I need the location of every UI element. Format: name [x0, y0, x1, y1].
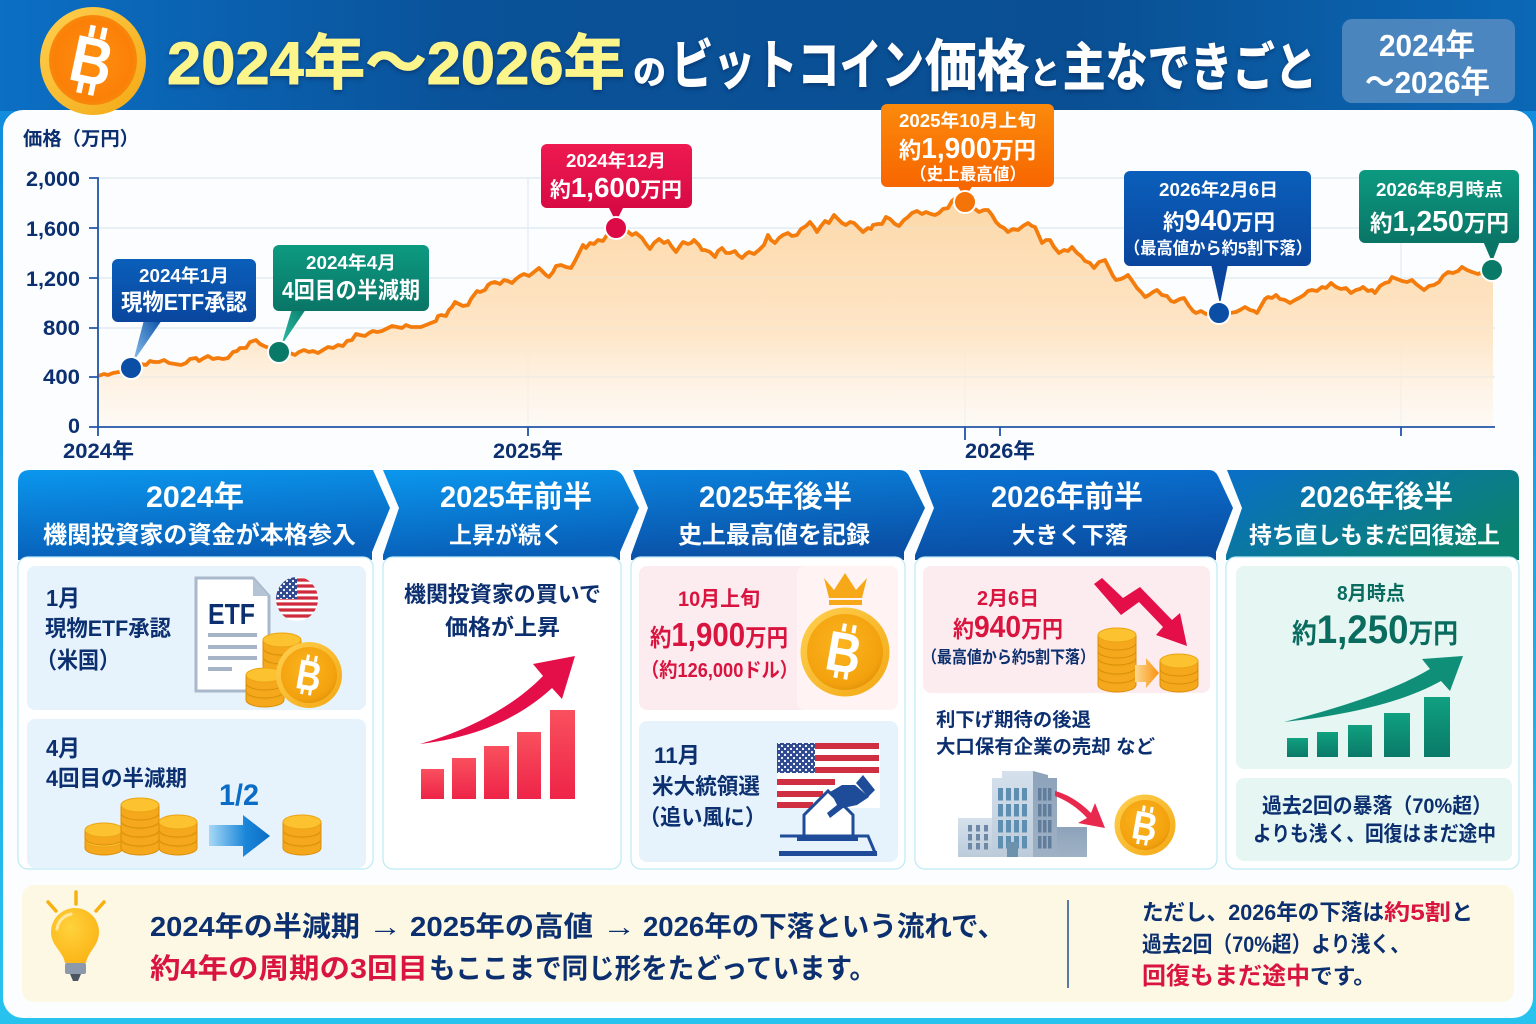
sub-panel: halving: 4月 — [46, 735, 80, 761]
icon: ballot box and hand — [779, 775, 877, 856]
icon: US flag circle — [276, 577, 318, 621]
panel: 2025年後半: 2025年後半 — [699, 481, 852, 514]
icon: bitcoin coin: B — [1129, 803, 1161, 851]
y axis labels: 1,600 — [26, 218, 80, 241]
panel: 2026年後半 — [1226, 470, 1519, 869]
y axis labels: 2,000 — [26, 168, 80, 191]
text: main summary: もここまで同じ形をたどっています。 — [429, 953, 876, 984]
panel: 2024年: 2024年 — [146, 481, 244, 514]
arrow: rising — [420, 656, 575, 744]
title — [167, 30, 1317, 98]
sub-panel: current price: 8月時点 — [1337, 582, 1405, 605]
y axis title: 価格（万円） — [23, 128, 139, 150]
icon: bitcoin coin large — [800, 608, 890, 696]
panel: 2025年前半: 価格が上昇 — [445, 615, 560, 640]
title: と — [1030, 55, 1060, 91]
sub-panel: all-time high — [639, 566, 898, 710]
period badge: ～2026年 — [1365, 65, 1490, 100]
header band — [0, 0, 1536, 111]
title: 主なできごと — [1063, 40, 1317, 98]
y axis labels: 1,200 — [26, 268, 80, 291]
icon: crown — [824, 573, 867, 605]
panel: 2026年前半: 2026年前半 — [991, 481, 1143, 514]
panel: 2025年前半: 上昇が続く — [449, 522, 564, 548]
text: side note: 回復もまだ途中 — [1142, 963, 1310, 990]
callout: 2024年1月 現物ETF承認: 2024年1月 — [139, 265, 229, 286]
y axis labels: 400 — [43, 366, 80, 389]
bar chart: rising — [421, 710, 575, 799]
icon: bitcoin coin — [40, 7, 146, 115]
callout: 2025年10月上旬 約1,900万円: 約1,900万円 — [899, 133, 1036, 165]
text: side note: です。 — [1310, 964, 1376, 989]
callout: 2024年12月 約1,600万円: 約1,600万円 — [550, 172, 682, 203]
panel: 2026年前半 — [915, 470, 1233, 869]
text: main summary: 約4年の周期の3回目 — [150, 953, 428, 984]
callout: 2024年1月 現物ETF承認 — [112, 259, 256, 379]
sub-panel: US election: 米大統領選 — [652, 774, 760, 799]
text: causes: 利下げ期待の後退 — [936, 709, 1091, 731]
sub-panel: ETF approval — [27, 566, 366, 710]
icon: bitcoin coin — [1114, 794, 1176, 856]
callout: 2026年2月6日 約940万円 — [1124, 171, 1312, 324]
icon: bitcoin coin: B — [64, 20, 120, 101]
title: の — [633, 54, 666, 92]
icon: ETF document: ETF — [208, 599, 255, 631]
callout: 2025年10月上旬 約1,900万円: （史上最高値） — [910, 164, 1026, 184]
sub-panel: all-time high: 10月上旬 — [678, 588, 760, 611]
icon: corporate building — [958, 771, 1087, 857]
sub-panel: US election: （追い風に） — [639, 805, 766, 830]
sub-panel: all-time high: 約1,900万円 — [650, 616, 788, 653]
price line chart — [23, 128, 1495, 463]
sub-panel: crash: 約940万円 — [953, 609, 1063, 644]
icon: coin stack after — [283, 815, 321, 855]
text: main summary: → — [602, 911, 636, 942]
panel: 2025年前半 — [383, 470, 639, 869]
arrow: recovery — [1284, 656, 1463, 722]
panel: 2026年後半: 持ち直しもまだ回復途上 — [1249, 522, 1500, 548]
sub-panel: crash — [922, 566, 1210, 693]
icon: ETF document — [196, 578, 269, 691]
sub-panel: US election: 11月 — [654, 743, 700, 768]
panel: summary — [22, 885, 1514, 1002]
callout: 2024年1月 現物ETF承認: 現物ETF承認 — [121, 289, 247, 315]
text: main summary: 2024年の半減期 — [150, 911, 360, 942]
callout: 2026年8月時点 約1,250万円: 2026年8月時点 — [1376, 179, 1503, 200]
icon: bitcoin coin large: B — [821, 618, 867, 686]
text: side note: 過去2回（70%超）より浅く、 — [1142, 932, 1410, 957]
text: causes — [936, 709, 1155, 758]
sub-panel: crash: 2月6日 — [977, 588, 1039, 610]
arrow: selling — [1055, 791, 1105, 828]
x axis labels — [63, 440, 1035, 463]
callout: 2024年4月 4回目の半減期 — [268, 245, 429, 363]
icon: bitcoin coin small — [276, 642, 342, 708]
icon: US flag — [777, 743, 880, 808]
title: 価格 — [925, 35, 1029, 98]
arrow: halving — [209, 815, 270, 857]
icon: coin stacks — [246, 633, 301, 707]
text: main summary: → — [368, 911, 402, 942]
sub-panel: ETF approval: 現物ETF承認 — [45, 616, 171, 641]
text: side note: ただし、2026年の下落は — [1142, 900, 1384, 925]
sub-panel: comparison: よりも浅く、回復はまだ途中 — [1253, 823, 1496, 846]
sub-panel: current price: 約1,250万円 — [1292, 608, 1458, 652]
sub-panel: halving — [27, 719, 366, 868]
panel: 2026年後半: 2026年後半 — [1300, 481, 1453, 514]
panel: 2025年後半 — [631, 470, 925, 869]
arrow: orange — [1135, 658, 1159, 688]
callout: 2026年8月時点 約1,250万円 — [1359, 170, 1519, 281]
callout: 2026年8月時点 約1,250万円: 約1,250万円 — [1370, 206, 1509, 238]
price line — [98, 197, 1493, 376]
callout: 2024年4月 4回目の半減期: 2024年4月 — [306, 252, 396, 273]
panel: 2024年 — [18, 470, 390, 869]
callout: 2024年12月 約1,600万円: 2024年12月 — [566, 150, 666, 171]
icon: bitcoin coin small: B — [293, 650, 325, 701]
price area — [98, 197, 1493, 427]
x axis labels: 2025年 — [493, 440, 563, 463]
sub-panel: ETF approval: 1月 — [46, 585, 80, 611]
text: causes: 大口保有企業の売却 など — [936, 736, 1155, 758]
text: main summary: 2026年の下落という流れで、 — [643, 911, 1005, 942]
x axis labels: 2026年 — [965, 440, 1035, 463]
icon: coin stacks before — [85, 798, 197, 855]
sub-panel: all-time high: （約126,000ドル） — [641, 659, 798, 682]
title: ビットコイン — [671, 36, 924, 96]
callout: 2025年10月上旬 約1,900万円: 2025年10月上旬 — [899, 110, 1036, 131]
panel: 2025年前半: 機関投資家の買いで — [404, 582, 601, 607]
sub-panel: comparison — [1236, 778, 1512, 861]
sub-panel: halving: 1/2 — [219, 779, 259, 812]
sub-panel: current price — [1236, 566, 1512, 769]
callout: 2024年4月 4回目の半減期: 4回目の半減期 — [282, 277, 420, 303]
text: side note: と — [1451, 900, 1473, 925]
callout: 2025年10月上旬 約1,900万円 — [881, 104, 1054, 213]
sub-panel: comparison: 過去2回の暴落（70%超） — [1262, 795, 1492, 818]
text: side note: 約5割 — [1384, 900, 1451, 925]
panel: 2025年後半: 史上最高値を記録 — [678, 522, 870, 549]
panel: 2025年前半: 2025年前半 — [440, 481, 592, 514]
callout: 2024年12月 約1,600万円 — [541, 144, 692, 239]
text: main summary: 2025年の高値 — [410, 911, 593, 942]
period badge — [1342, 19, 1515, 103]
x axis labels: 2024年 — [63, 440, 134, 463]
text: main summary — [150, 911, 1005, 984]
panel: 2026年前半: 大きく下落 — [1012, 522, 1128, 548]
sub-panel: ETF approval: （米国） — [36, 647, 120, 673]
text: side note — [1142, 900, 1473, 990]
period badge: 2024年 — [1379, 28, 1475, 63]
title: 2024年～2026年 — [167, 30, 625, 97]
y axis labels: 0 — [68, 415, 80, 438]
arrow: falling — [1094, 578, 1187, 646]
icon: coin stacks shrinking — [1098, 628, 1198, 692]
callout: 2026年2月6日 約940万円: 2026年2月6日 — [1159, 179, 1278, 200]
sub-panel: crash: （最高値から約5割下落） — [922, 647, 1095, 667]
y axis labels: 800 — [43, 317, 80, 340]
sub-panel: halving: 4回目の半減期 — [46, 766, 187, 791]
y axis labels — [26, 168, 80, 438]
icon: light bulb — [48, 892, 104, 981]
bar chart: recovery — [1287, 697, 1450, 757]
callout: 2026年2月6日 約940万円: 約940万円 — [1163, 205, 1275, 237]
panel: 2024年: 機関投資家の資金が本格参入 — [43, 521, 356, 549]
sub-panel: US election — [639, 721, 898, 862]
callout: 2026年2月6日 約940万円: （最高値から約5割下落） — [1124, 238, 1312, 258]
